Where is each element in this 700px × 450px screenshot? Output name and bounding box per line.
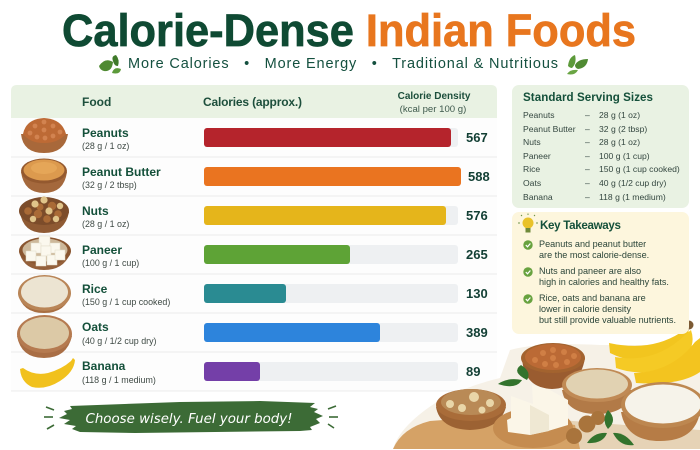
panel: standard serving sizes: –	[585, 110, 590, 120]
icon: nuts bowl	[19, 196, 69, 233]
row: peanut butter: 588	[468, 169, 490, 184]
table header: Calories (approx.)	[203, 95, 302, 109]
panel: standard serving sizes: Nuts	[523, 137, 541, 147]
takeaway 3: but still provide valuable nutrients.	[539, 315, 676, 325]
row: nuts: Nuts	[82, 204, 109, 218]
panel: standard serving sizes: 118 g (1 medium)	[599, 192, 666, 202]
subtitle	[99, 55, 588, 74]
icon: peanuts bowl	[21, 118, 68, 153]
icon: paneer bowl	[19, 236, 71, 270]
panel: standard serving sizes: 32 g (2 tbsp)	[599, 124, 647, 134]
panel: standard serving sizes: Oats	[523, 178, 541, 188]
panel: standard serving sizes: 40 g (1/2 cup dry)	[599, 178, 666, 188]
panel: standard serving sizes: Peanut Butter	[523, 124, 576, 134]
takeaway 2: high in calories and healthy fats.	[539, 277, 669, 287]
panel: standard serving sizes: Rice	[523, 164, 540, 174]
panel: standard serving sizes: Standard Serving Sizes	[523, 91, 653, 104]
row: rice: Rice	[82, 282, 108, 296]
panel: standard serving sizes: 28 g (1 oz)	[599, 110, 640, 120]
panel: standard serving sizes: Paneer	[523, 151, 551, 161]
banner: choose wisely	[44, 401, 338, 433]
panel: standard serving sizes: 100 g (1 cup)	[599, 151, 650, 161]
table header: (kcal per 100 g)	[400, 104, 466, 115]
panel: standard serving sizes: –	[585, 124, 590, 134]
walnuts	[566, 411, 605, 444]
icon: light bulb	[518, 214, 538, 232]
panel: standard serving sizes: Peanuts	[523, 110, 555, 120]
table header: Food	[82, 95, 111, 109]
table header: Calorie Density	[398, 91, 471, 102]
row: paneer: Paneer	[82, 243, 122, 257]
row: banana: 89	[466, 364, 480, 379]
row: peanuts: 567	[466, 130, 488, 145]
row: rice: 130	[466, 286, 488, 301]
takeaway 3: lower in calorie density	[539, 304, 631, 314]
table header	[11, 85, 497, 118]
panel: standard serving sizes: –	[585, 164, 590, 174]
icon: right leaf	[567, 55, 588, 74]
bananas	[609, 320, 700, 384]
icon: rice bowl	[18, 275, 71, 313]
board and paneer	[493, 385, 573, 448]
row: nuts: (28 g / 1 oz)	[82, 219, 129, 229]
panel: standard serving sizes: –	[585, 178, 590, 188]
takeaway 1: are the most calorie-dense.	[539, 250, 649, 260]
row: nuts: 576	[466, 208, 488, 223]
icon: left leaf	[99, 55, 121, 74]
illustration: food spread	[393, 320, 700, 449]
takeaway 2: Nuts and paneer are also	[539, 266, 641, 276]
row: nuts	[19, 196, 488, 233]
panel: standard serving sizes: Banana	[523, 192, 553, 202]
cloth	[393, 344, 700, 449]
panel: key takeaways: Key Takeaways	[540, 219, 621, 232]
row: peanut butter	[21, 158, 490, 193]
tan table	[560, 420, 700, 449]
takeaway 3	[523, 293, 676, 325]
panel: key takeaways	[512, 212, 689, 334]
row: oats: (40 g / 1/2 cup dry)	[82, 336, 157, 346]
row: paneer	[19, 236, 488, 270]
wooden board	[393, 415, 580, 449]
icon: oats bowl	[17, 315, 72, 358]
takeaway 1	[523, 239, 649, 260]
row: banana	[20, 358, 480, 388]
icon: peanut butter bowl	[21, 158, 67, 193]
banner: choose wisely: Choose wisely. Fuel your body!	[86, 411, 292, 427]
row: oats: 389	[466, 325, 488, 340]
bowl: peanuts	[521, 343, 585, 389]
takeaway 3: Rice, oats and banana are	[539, 293, 646, 303]
icon: banana	[20, 358, 75, 388]
bowl: oats	[562, 368, 632, 414]
row: banana: (118 g / 1 medium)	[82, 375, 156, 385]
row: oats	[17, 315, 488, 358]
title: Calorie-Dense Indian Foods	[62, 5, 636, 56]
row: peanut butter: (32 g / 2 tbsp)	[82, 180, 137, 190]
leaves	[498, 365, 634, 445]
row: banana: Banana	[82, 359, 126, 373]
row: paneer: (100 g / 1 cup)	[82, 258, 139, 268]
panel: standard serving sizes	[512, 85, 689, 208]
panel: standard serving sizes: –	[585, 151, 590, 161]
row: peanuts: Peanuts	[82, 126, 129, 140]
row: oats: Oats	[82, 320, 109, 334]
row: rice	[18, 275, 488, 313]
row: peanuts	[21, 118, 488, 153]
takeaway 2	[523, 266, 669, 287]
row: peanut butter: Peanut Butter	[82, 165, 161, 179]
row: rice: (150 g / 1 cup cooked)	[82, 297, 170, 307]
panel: standard serving sizes: 150 g (1 cup cooked)	[599, 164, 680, 174]
row: peanuts: (28 g / 1 oz)	[82, 141, 129, 151]
panel: calorie table	[11, 85, 497, 391]
bowl: rice	[621, 382, 700, 441]
panel: standard serving sizes: –	[585, 137, 590, 147]
panel: standard serving sizes: 28 g (1 oz)	[599, 137, 640, 147]
subtitle text: More Calories • More Energy • Traditional & Nutritious	[128, 56, 558, 72]
takeaway 1: Peanuts and peanut butter	[539, 239, 646, 249]
row: paneer: 265	[466, 247, 488, 262]
bowl: nuts	[436, 389, 506, 430]
panel: standard serving sizes: –	[585, 192, 590, 202]
